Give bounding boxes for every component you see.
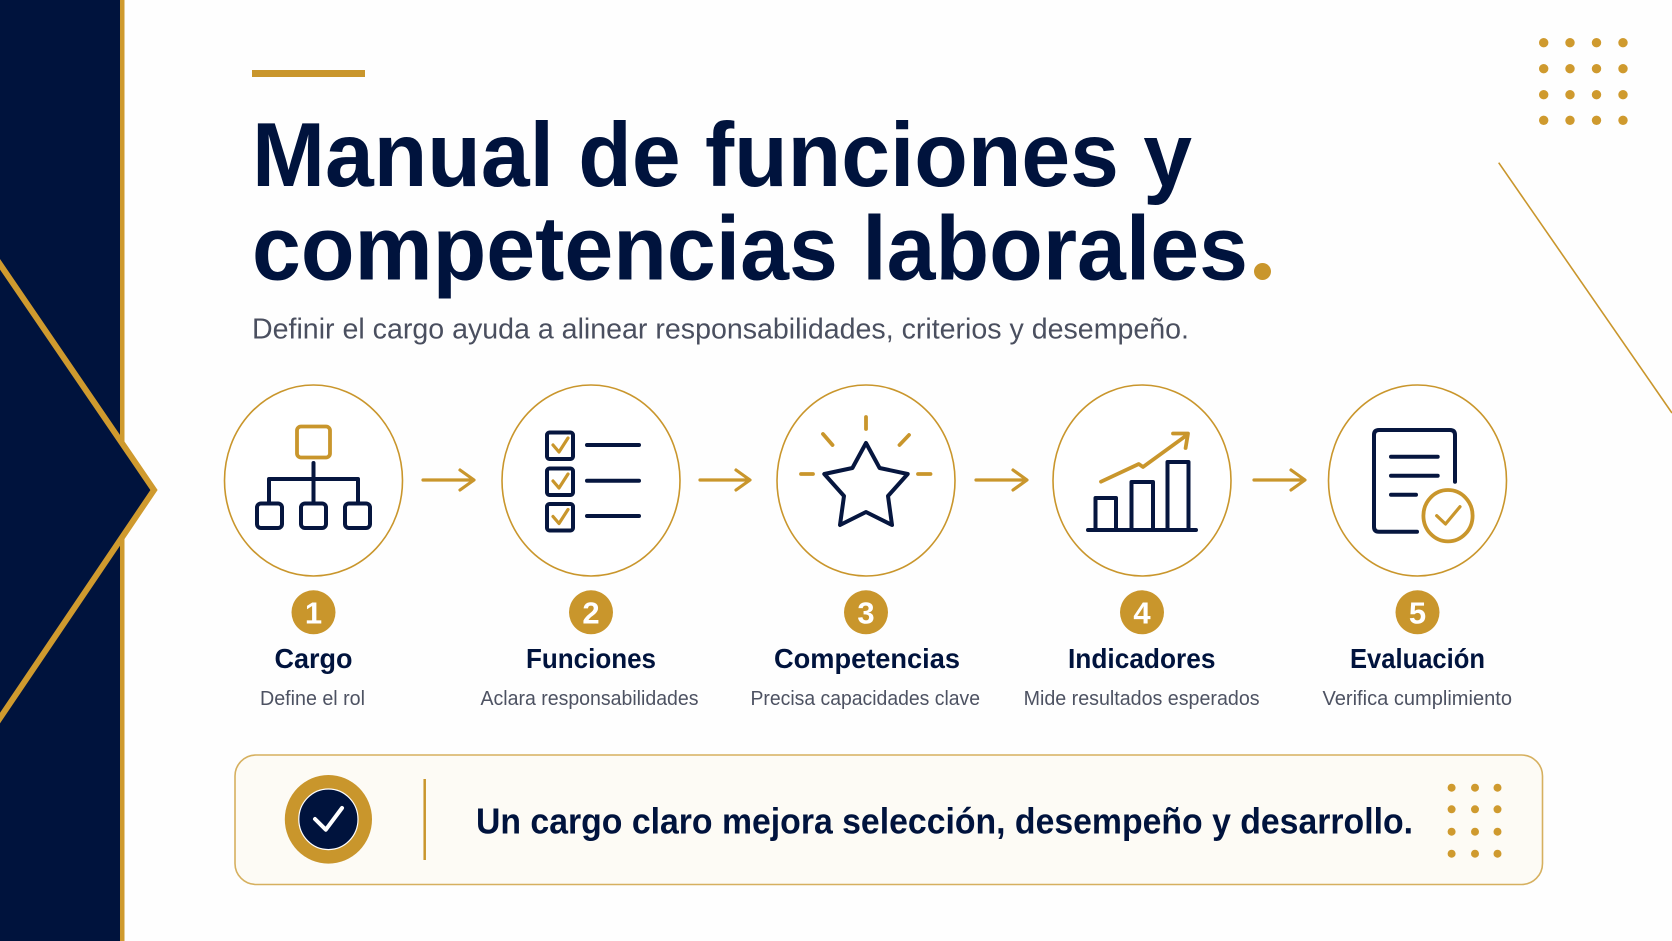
number badge 1 <box>292 590 336 634</box>
description: Verifica cumplimiento: Verifica cumplimiento <box>1322 688 1512 710</box>
callout message: Un cargo claro mejora selección, desempeño y desarrollo. <box>476 800 1413 842</box>
number badge 2 <box>569 590 613 634</box>
number badge 4 <box>1120 590 1164 634</box>
description: Aclara responsabilidades: Aclara responsabilidades <box>480 688 698 710</box>
number badge 3 <box>844 590 888 634</box>
label: Competencias: Competencias <box>774 643 960 674</box>
callout divider <box>423 779 426 860</box>
label: Cargo: Cargo <box>274 643 352 674</box>
icon circle: rising bars <box>1053 385 1231 576</box>
number badge 1: 1 <box>305 596 322 630</box>
icon circle: star <box>777 385 955 576</box>
label: Evaluación: Evaluación <box>1350 643 1485 674</box>
icon circle: document with check <box>1328 385 1506 576</box>
number badge 5: 5 <box>1409 596 1426 630</box>
icon: check badge <box>285 775 372 864</box>
step 1: Cargo <box>224 385 402 710</box>
description: Mide resultados esperados: Mide resultados esperados <box>1024 688 1260 710</box>
panel: callout <box>235 755 1542 884</box>
step 5: Evaluación <box>1322 385 1512 710</box>
icon circle: checklist <box>502 385 680 576</box>
number badge 3: 3 <box>857 596 875 630</box>
arrow 3 to 4 <box>976 470 1027 490</box>
arrow 4 to 5 <box>1254 470 1305 490</box>
title accent bar <box>252 70 365 77</box>
title: Manual de funciones y <box>252 105 1192 206</box>
label: Funciones: Funciones <box>526 643 656 674</box>
description: Precisa capacidades clave: Precisa capacidades clave <box>750 688 980 710</box>
subtitle: Definir el cargo ayuda a alinear responsabilidades, criterios y desempeño. <box>252 314 1189 346</box>
step 4: Indicadores <box>1024 385 1260 710</box>
description: Define el rol: Define el rol <box>260 688 365 710</box>
step 2: Funciones <box>480 385 698 710</box>
arrow 2 to 3 <box>700 470 750 490</box>
title: competencias laborales <box>252 198 1248 300</box>
number badge 2: 2 <box>582 596 600 630</box>
title <box>252 105 1271 300</box>
decorative diagonal line <box>1499 163 1672 413</box>
label: Indicadores: Indicadores <box>1068 643 1216 674</box>
number badge 5 <box>1396 590 1440 634</box>
decorative dot grid: callout <box>1448 784 1502 858</box>
panel: left navy band with chevron <box>0 0 154 941</box>
icon circle: org chart <box>224 385 402 576</box>
step 3: Competencias <box>750 385 980 710</box>
arrow 1 to 2 <box>423 470 474 490</box>
number badge 4: 4 <box>1133 596 1151 630</box>
decorative dot grid: top right <box>1539 38 1628 125</box>
